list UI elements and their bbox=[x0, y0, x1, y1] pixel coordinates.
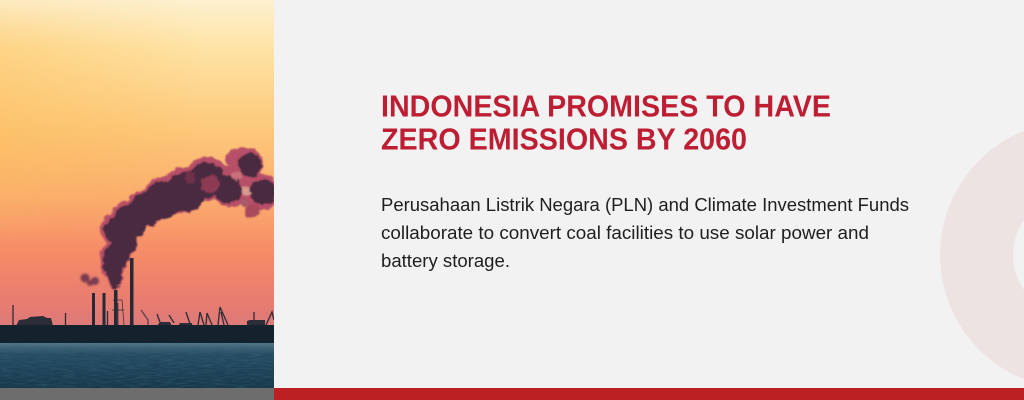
body text: battery storage. bbox=[381, 251, 510, 271]
chimneys bbox=[92, 258, 134, 326]
body text: Perusahaan Listrik Negara (PLN) and Climate Investment Funds bbox=[381, 195, 909, 215]
bottom bar: grey bbox=[0, 388, 274, 400]
small smoke puff bbox=[80, 274, 99, 286]
heading: ZERO EMISSIONS BY 2060 bbox=[381, 122, 747, 156]
decorative ring bbox=[940, 121, 1024, 389]
sea bbox=[0, 343, 274, 388]
body text bbox=[381, 195, 909, 271]
photo: smokestacks at sunset bbox=[0, 0, 278, 388]
bottom bar: red bbox=[274, 388, 1024, 400]
shoreline bbox=[0, 325, 274, 343]
heading bbox=[381, 88, 831, 156]
heading: INDONESIA PROMISES TO HAVE bbox=[381, 88, 831, 124]
smoke plume bbox=[100, 147, 278, 291]
skyline: cranes and poles bbox=[13, 300, 274, 325]
skyline: buildings bbox=[16, 316, 265, 325]
body text: collaborate to convert coal facilities to use solar power and bbox=[381, 223, 869, 243]
